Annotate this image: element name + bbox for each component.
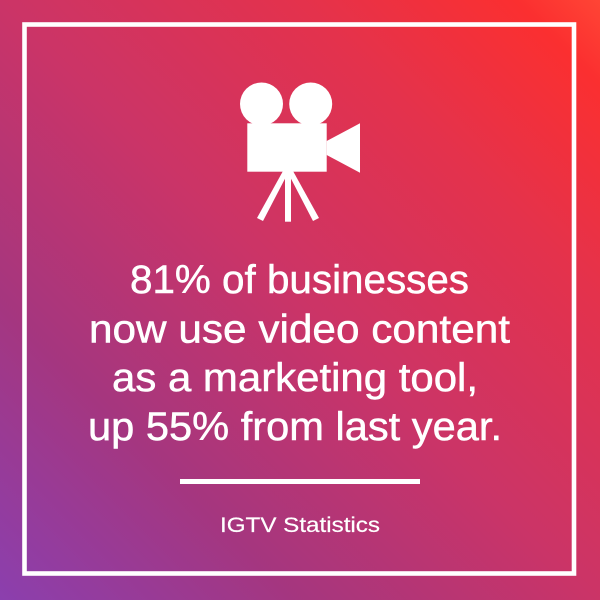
- headline statistic: [88, 258, 510, 449]
- headline statistic: up 55% from last year.: [88, 405, 502, 449]
- headline statistic: as a marketing tool,: [112, 356, 478, 400]
- divider line: [180, 479, 420, 484]
- headline statistic: now use video content: [89, 308, 510, 352]
- icon: movie camera on tripod: [240, 82, 360, 222]
- source label: IGTV Statistics: [220, 514, 380, 537]
- headline statistic: 81% of businesses: [130, 258, 469, 302]
